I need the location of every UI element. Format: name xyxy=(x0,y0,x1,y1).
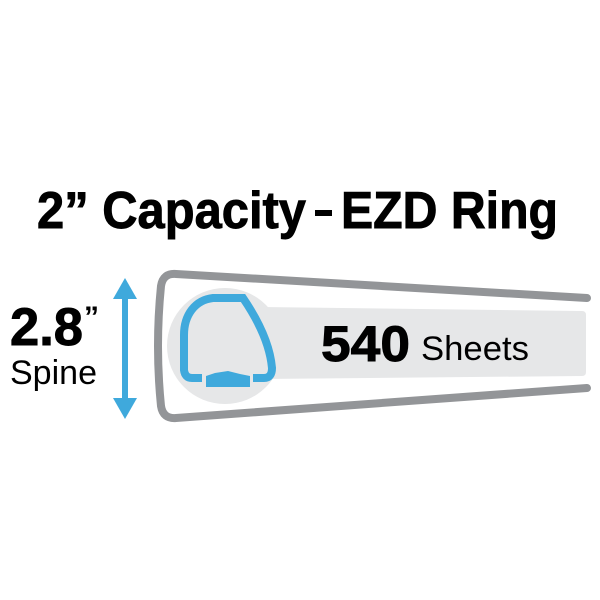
binder diagram xyxy=(158,274,587,418)
binder cover outline xyxy=(158,274,587,418)
capacity panel xyxy=(262,307,586,379)
title: EZD Ring xyxy=(341,182,558,240)
icon: ring xyxy=(184,298,272,387)
arrow: spine height xyxy=(113,278,137,419)
sheet number: 540 xyxy=(321,316,410,372)
sheet label: Sheets xyxy=(421,330,529,368)
title xyxy=(37,182,558,240)
spine value: 2.8 xyxy=(10,298,83,357)
sheet count xyxy=(321,316,529,372)
ring background circle xyxy=(167,288,283,404)
spine caption: Spine xyxy=(10,354,97,392)
inch mark: ” xyxy=(84,301,99,334)
title: 2” Capacity xyxy=(37,182,306,240)
spine measurement label xyxy=(10,298,99,392)
